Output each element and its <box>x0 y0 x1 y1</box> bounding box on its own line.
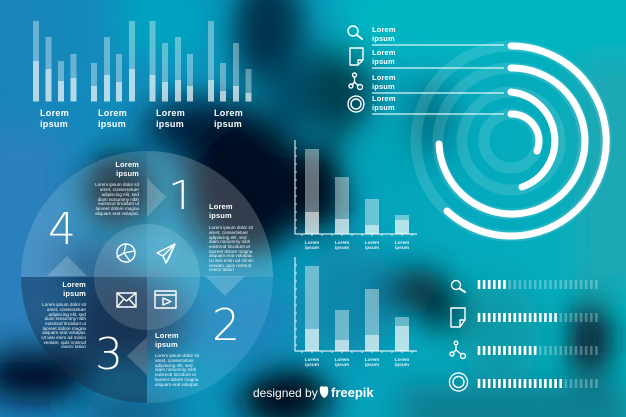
quadrant: top right <box>147 151 273 277</box>
text block: top right: exerci tation <box>209 267 234 272</box>
text block: bottom left: Ut wisi enim ad minim <box>41 335 86 340</box>
text block: top left: euismod tincidunt ut <box>98 201 140 206</box>
text block: bottom right: adipiscing elit, sed <box>155 363 193 368</box>
text block: top right: aliquam erat volutpat. <box>209 253 253 258</box>
text block: top right: amet, consectetuer <box>209 230 249 235</box>
text block: top left: ipsum <box>116 169 139 178</box>
chart: column chart lower: Lorem <box>395 357 409 363</box>
chart: column chart lower: ipsum <box>335 362 349 368</box>
legend leader lines <box>372 45 504 114</box>
bar group 3 <box>150 21 193 129</box>
quadrant: bottom left <box>21 277 147 403</box>
icon: nodes <box>349 73 362 90</box>
bar group 4: ipsum <box>214 119 242 129</box>
chart: column chart lower: ipsum <box>395 362 409 368</box>
text block: bottom right <box>155 331 200 387</box>
meter 4 <box>479 379 596 388</box>
legend: ring labels: Lorem <box>372 48 396 57</box>
legend: ring labels: ipsum <box>372 82 395 91</box>
legend: ring labels: Lorem <box>372 73 396 82</box>
text block: bottom left: amet, consectetuer <box>47 307 86 312</box>
text block: bottom right: euismod tincidunt ut <box>155 372 197 377</box>
panel: circular four-part diagram <box>21 151 273 403</box>
text block: bottom left: laoreet dolore magna <box>43 326 86 331</box>
text block: bottom left: Lorem <box>62 280 86 289</box>
chart: column chart upper: ipsum <box>335 245 349 251</box>
text block: bottom left <box>41 280 87 349</box>
text block: bottom left: veniam, quis nostrud <box>44 340 86 345</box>
text block: bottom right: Lorem ipsum dolor sit <box>155 353 200 358</box>
number 3: 3 <box>95 329 123 380</box>
text block: top left: amet, consectetuer <box>100 187 139 192</box>
chart: column chart upper: ipsum <box>305 245 319 251</box>
quadrant: top left <box>21 151 147 277</box>
bar group 2 <box>91 21 135 129</box>
legend: ring labels: Lorem <box>372 25 396 34</box>
text block: bottom right: Lorem <box>155 331 179 340</box>
panel: progress meters <box>450 280 596 391</box>
chart: column chart upper: Lorem <box>335 240 349 246</box>
chart: column chart upper: ipsum <box>365 245 379 251</box>
legend: ring labels: Lorem <box>372 94 396 103</box>
text block: bottom right: aliquam erat volutpat. <box>155 382 199 387</box>
credit: designed by freepik: designed by <box>253 386 318 400</box>
legend: ring labels: ipsum <box>372 57 395 66</box>
chart: column chart upper <box>295 140 417 251</box>
credit: designed by freepik <box>253 385 374 400</box>
text block: top right: Lorem <box>209 202 233 211</box>
chart: column chart lower: Lorem <box>305 357 319 363</box>
icon: envelope <box>117 293 136 307</box>
triangle markers <box>47 178 245 375</box>
number 2: 2 <box>212 300 240 351</box>
text block: top left: Lorem <box>115 160 139 169</box>
chart: column chart upper: Lorem <box>305 240 319 246</box>
bar group 2: Lorem <box>98 108 127 118</box>
number 1: 1 <box>168 172 196 223</box>
text block: top right: laoreet dolore magna <box>209 249 253 254</box>
solid arcs <box>439 46 606 236</box>
text block: bottom left: aliquam erat volutpat. <box>42 330 86 335</box>
bar group 2: ipsum <box>98 119 126 129</box>
text block: bottom right: ipsum <box>155 340 178 349</box>
icon: gear <box>348 96 364 112</box>
chart: column chart lower: Lorem <box>365 357 379 363</box>
text block: top left: adipiscing elit, sed <box>101 192 139 197</box>
quadrant: bottom right <box>147 277 273 403</box>
icon: nodes <box>450 341 466 358</box>
icon: pie chart <box>117 244 135 262</box>
text block: top right: diam nonummy nibh <box>209 239 251 244</box>
credit: designed by freepik: freepik <box>331 385 374 400</box>
meter 3 <box>479 346 596 355</box>
text block: bottom left: ipsum <box>63 289 86 298</box>
text block: bottom right: laoreet dolore magna <box>155 377 199 382</box>
bar group 4: Lorem <box>214 108 243 118</box>
text block: bottom left: adipiscing elit, sed <box>48 312 86 317</box>
text block: bottom right: diam nonummy nibh <box>155 367 197 372</box>
chart: column chart upper: Lorem <box>365 240 379 246</box>
icon: gear <box>450 373 468 391</box>
text block: top left: Lorem ipsum dolor sit <box>95 182 140 187</box>
text block: top right: Ut wisi enim ad minim <box>209 258 254 263</box>
bar group 1 <box>33 21 76 129</box>
text block: top right: veniam, quis nostrud <box>209 263 252 268</box>
bar group 1: Lorem <box>40 108 69 118</box>
chart: column chart lower: Lorem <box>335 357 349 363</box>
meter 2 <box>479 313 596 322</box>
inner circle <box>94 224 200 330</box>
text block: bottom left: exerci tation <box>61 344 86 349</box>
meter 1 <box>479 280 596 289</box>
text block: top left: laoreet dolore magna <box>96 206 139 211</box>
icon: document <box>451 308 465 327</box>
ghost rings <box>416 46 606 236</box>
text block: top right: ipsum <box>209 211 232 220</box>
text block: bottom left: diam nonummy nibh <box>45 316 86 321</box>
icon: document <box>350 48 363 65</box>
bar group 4 <box>208 21 252 129</box>
text block: top left: aliquam erat volutpat. <box>95 211 139 216</box>
text block: bottom right: amet, consectetuer <box>155 358 195 363</box>
legend: ring labels: ipsum <box>372 34 395 43</box>
chart: column chart lower <box>295 257 417 368</box>
chart: column chart upper: ipsum <box>395 245 409 251</box>
bar group 3: ipsum <box>156 119 184 129</box>
chart: column chart upper: Lorem <box>395 240 409 246</box>
chart: column chart lower: ipsum <box>365 362 379 368</box>
chart: column chart lower: ipsum <box>305 362 319 368</box>
text block: top right: Lorem ipsum dolor sit <box>209 225 254 230</box>
icon: freepik bird <box>320 386 328 398</box>
bar group 1: ipsum <box>40 119 68 129</box>
text block: top right: euismod tincidunt ut <box>209 244 251 249</box>
legend: ring labels: ipsum <box>372 103 395 112</box>
chart: radial rings <box>372 45 606 236</box>
text block: top left: diam nonummy nibh <box>98 197 139 202</box>
text block: bottom left: Lorem ipsum dolor sit <box>42 302 87 307</box>
text block: top right <box>209 202 254 272</box>
text block: bottom left: euismod tincidunt ut <box>45 321 87 326</box>
text block: top right: adipiscing elit, sed <box>209 235 247 240</box>
chart: top bars <box>33 21 252 129</box>
text block: top left <box>95 160 140 216</box>
legend: ring labels <box>348 25 396 112</box>
icon: magnifier <box>348 26 362 39</box>
icon: paper plane <box>157 244 175 263</box>
icon: magnifier <box>452 280 465 292</box>
number 4: 4 <box>48 204 76 255</box>
icon: video window <box>155 291 176 308</box>
bar group 3: Lorem <box>156 108 185 118</box>
